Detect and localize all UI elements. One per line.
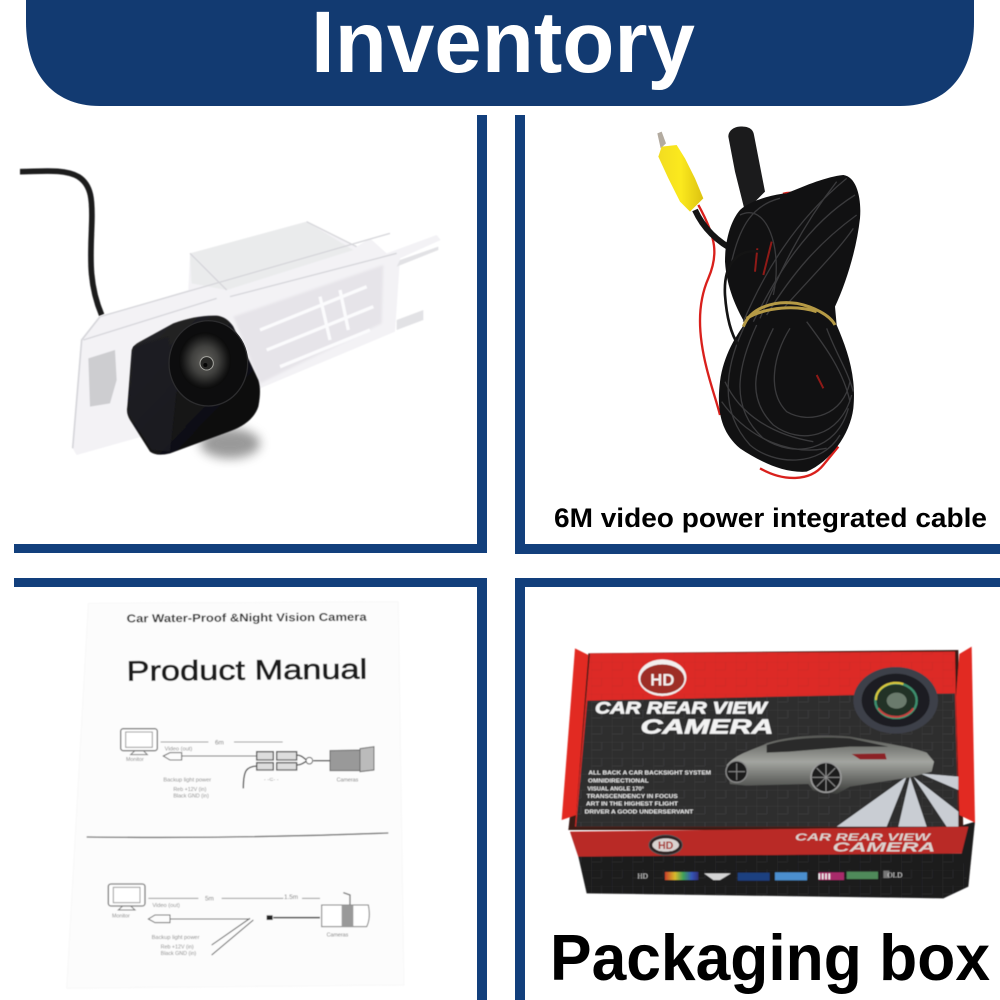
box feature list: OMNIDIRECTIONAL	[588, 778, 649, 784]
red wire	[698, 205, 838, 478]
wiring diagram 1: Cameras	[337, 777, 359, 783]
caption: packaging box: Packaging box	[550, 921, 990, 994]
box seam shadow	[568, 650, 963, 830]
light beams	[837, 773, 958, 827]
wiring diagram 1: 6m	[215, 739, 224, 746]
front title line 2: CAMERA	[833, 840, 935, 854]
camera cable	[20, 171, 102, 315]
wiring diagram 1: Reb +12V (in)	[173, 787, 207, 793]
mount shadow	[200, 428, 260, 458]
wiring diagram 2: Monitor	[112, 914, 130, 920]
wiring diagram 1: Backup light power	[163, 778, 211, 784]
panel frame: camera	[14, 115, 487, 553]
panel frame: manual	[14, 578, 487, 1000]
wiring diagram 2	[108, 884, 369, 957]
wiring diagram 1: Video (out)	[165, 746, 192, 752]
panel: cable photo	[657, 127, 860, 478]
clear plastic mount	[73, 222, 441, 455]
box title: CAR REAR VIEW	[595, 698, 768, 717]
box feature list: ART IN THE HIGHEST FLIGHT	[586, 802, 679, 808]
title banner	[26, 0, 974, 106]
coil silhouette	[719, 175, 860, 472]
black wire from plug	[695, 210, 737, 252]
inner red strands	[755, 242, 823, 388]
wiring diagram 1: Monitor	[126, 757, 144, 763]
wiring diagram 2: 5m	[205, 895, 214, 902]
wiring diagram 1: - -⊂- -	[264, 777, 279, 783]
box title line 2: CAMERA	[641, 715, 773, 738]
box feature list: DRIVER A GOOD UNDERSERVANT	[585, 810, 694, 816]
manual subtitle: Car Water-Proof &Night Vision Camera	[127, 612, 367, 625]
box lower flap	[570, 822, 975, 898]
feature icons strip: HD	[637, 872, 648, 881]
wiring diagram 2: Black GND (in)	[161, 951, 196, 957]
feature icons strip	[637, 870, 902, 881]
front title: CAR REAR VIEW	[795, 833, 933, 844]
box feature list: TRANSCENDENCY IN FOCUS	[587, 794, 678, 800]
box dark face	[576, 693, 958, 827]
loop strands	[722, 178, 857, 460]
paper sheet	[67, 602, 404, 988]
box feature list: VISUAL ANGLE 170°	[587, 786, 644, 792]
side flaps	[562, 648, 588, 820]
front HD badge	[649, 835, 682, 855]
HD badge	[638, 659, 686, 696]
camera left facet	[128, 337, 177, 452]
front HD badge: HD	[658, 840, 674, 852]
caption: cable: 6M video power integrated cable	[554, 503, 987, 533]
wiring diagram 1: Black GND (in)	[173, 794, 209, 800]
box feature list	[585, 770, 711, 816]
panel: product manual	[67, 602, 404, 988]
car illustration	[726, 735, 934, 794]
fold line	[87, 833, 388, 837]
yellow RCA plug	[657, 132, 703, 212]
lens graphic	[853, 667, 938, 734]
wiring diagram 2: Cameras	[327, 932, 349, 938]
panel: camera photo	[20, 171, 441, 458]
box front red strip	[570, 827, 968, 857]
wiring diagram 2: 1.5m	[284, 894, 298, 901]
panel: packaging box	[562, 647, 975, 898]
rubber band	[743, 303, 835, 327]
wiring diagram 2: Backup light power	[152, 935, 200, 941]
black loop wire	[725, 251, 760, 345]
panel frame: packaging box	[515, 578, 1000, 1000]
wiring diagram 2: Video (out)	[152, 903, 180, 909]
panel frame: cable	[515, 115, 1000, 554]
box feature list: ALL BACK A CAR BACKSIGHT SYSTEM	[588, 770, 711, 776]
lens glass	[179, 332, 231, 389]
black connector	[728, 127, 765, 212]
camera body	[127, 316, 260, 455]
wiring diagram 2: Reb +12V (in)	[161, 944, 194, 950]
feature icons strip: OLD	[887, 870, 902, 879]
lens ring	[169, 321, 248, 406]
manual heading: Product Manual	[126, 654, 367, 687]
box red lid	[575, 652, 958, 827]
wiring diagram 1	[121, 729, 374, 800]
HD badge: HD	[650, 670, 674, 689]
